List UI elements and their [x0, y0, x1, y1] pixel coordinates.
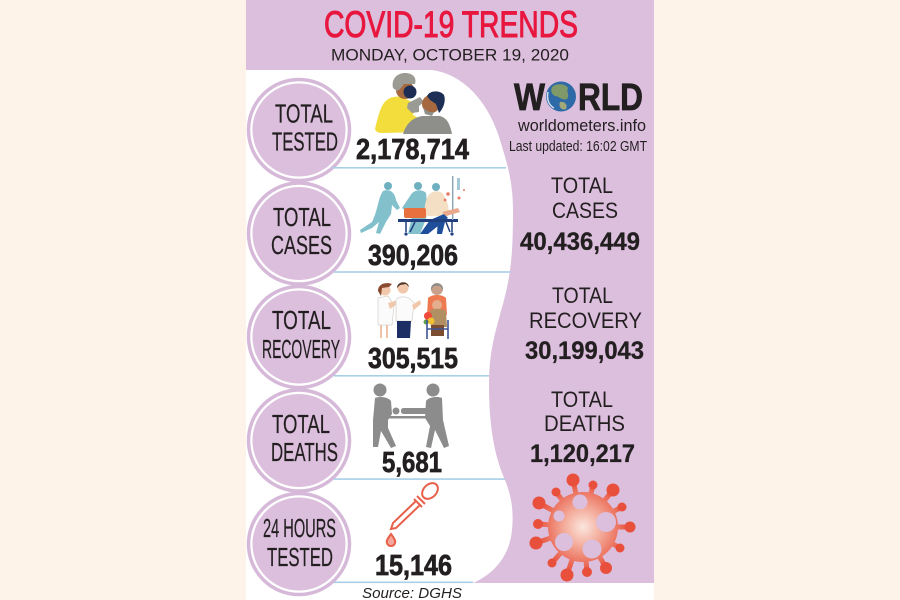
worldometers logo: RLD	[578, 77, 643, 119]
badge: total recovery	[248, 286, 350, 388]
stat: world total recovery: 30,199,043	[525, 337, 644, 365]
icon: doctors and recovered patient	[378, 282, 448, 339]
badge: 24 hours tested: 24 HOURS	[263, 513, 336, 543]
stat: world total recovery: RECOVERY	[529, 308, 642, 333]
row: total deaths	[248, 384, 449, 491]
badge: total deaths: DEATHS	[271, 437, 338, 467]
row: 24 hours tested	[248, 480, 452, 594]
number: 5,681: 5,681	[382, 447, 442, 479]
number: 2,178,714: 2,178,714	[356, 134, 469, 166]
stat: world total deaths	[530, 387, 635, 468]
title: COVID-19 TRENDS	[324, 4, 578, 45]
stat: world total deaths: 1,120,217	[530, 440, 635, 468]
row: total cases	[248, 176, 465, 284]
badge: total tested: TESTED	[272, 127, 338, 157]
row: total tested	[248, 73, 469, 180]
stat: world total cases: CASES	[552, 198, 618, 223]
badge: total cases	[248, 183, 350, 284]
stat: world total recovery: TOTAL	[552, 283, 613, 308]
badge: total recovery: RECOVERY	[262, 334, 340, 364]
badge: total tested	[248, 80, 350, 180]
row: total recovery	[248, 282, 458, 388]
icon: nasal swab test	[375, 73, 452, 134]
worldometers logo	[514, 77, 643, 119]
stat: world total cases: TOTAL	[551, 173, 613, 198]
badge: 24 hours tested	[248, 494, 350, 594]
panel: infographic card	[246, 0, 654, 600]
icon: patient on stretcher	[360, 176, 465, 236]
icon: dropper	[387, 480, 441, 546]
stat: world total deaths: TOTAL	[551, 387, 613, 412]
icon: two figures carrying a stretcher	[373, 384, 449, 448]
worldometers logo: W	[514, 77, 545, 119]
stat: world total recovery	[525, 283, 644, 365]
number: 305,515: 305,515	[368, 343, 458, 375]
number: 390,206: 390,206	[368, 240, 458, 272]
stat: world total deaths: DEATHS	[544, 411, 625, 436]
badge: total cases: TOTAL	[273, 202, 331, 232]
badge: total cases: CASES	[271, 230, 332, 260]
website: worldometers.info	[517, 116, 646, 135]
badge: 24 hours tested: TESTED	[267, 542, 333, 572]
icon: globe	[546, 82, 576, 112]
badge: total deaths: TOTAL	[272, 409, 330, 439]
badge: total deaths	[248, 390, 350, 491]
icon: coronavirus	[530, 474, 636, 582]
badge: total recovery: TOTAL	[272, 305, 331, 335]
badge: total tested: TOTAL	[275, 99, 333, 129]
date subtitle: MONDAY, OCTOBER 19, 2020	[331, 46, 569, 64]
number: 15,146: 15,146	[375, 550, 452, 582]
stat: world total cases	[520, 173, 640, 256]
last updated: Last updated: 16:02 GMT	[509, 138, 647, 155]
stat: world total cases: 40,436,449	[520, 228, 640, 256]
